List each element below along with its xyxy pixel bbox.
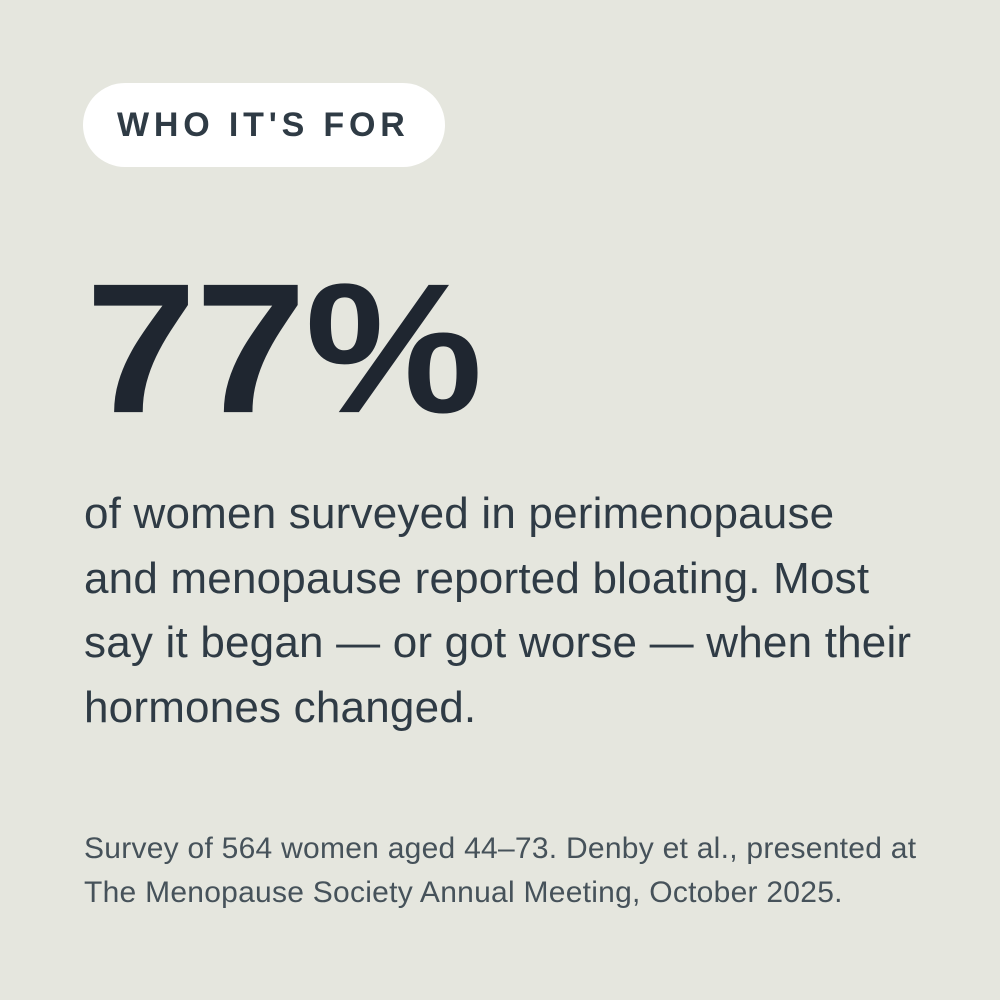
body text: say it began — or got worse — when their bbox=[84, 618, 911, 667]
source note: Survey of 564 women aged 44–73. Denby et al., presented at bbox=[84, 832, 916, 865]
source note: The Menopause Society Annual Meeting, October 2025. bbox=[84, 876, 843, 909]
tag pill: who it's for bbox=[83, 83, 444, 166]
body text: of women surveyed in perimenopause bbox=[84, 489, 834, 538]
body text: and menopause reported bloating. Most bbox=[84, 554, 869, 602]
body text bbox=[84, 489, 911, 732]
tag pill: who it's for: WHO IT'S FOR bbox=[117, 106, 410, 144]
body text: hormones changed. bbox=[84, 682, 476, 732]
big statistic: 77%: 77% bbox=[86, 245, 481, 452]
source note bbox=[84, 832, 916, 909]
